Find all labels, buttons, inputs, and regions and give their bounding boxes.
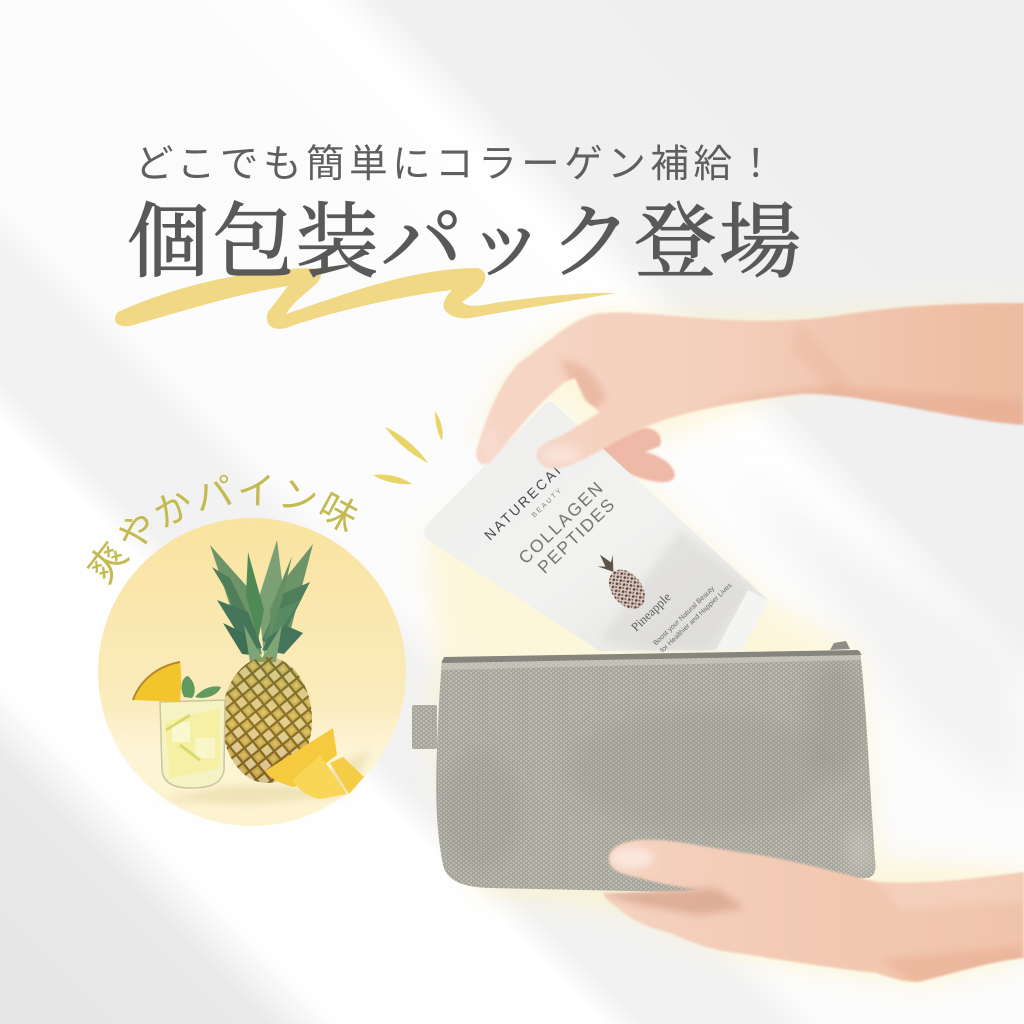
lower hand	[600, 840, 1024, 985]
sachet brand text: COLLAGEN	[515, 477, 608, 568]
table shadow	[160, 748, 372, 805]
sachet small print: for Healthier and Happier Lives	[659, 582, 734, 654]
pineapple crown	[210, 540, 313, 662]
main heading: 個包装パック登場	[127, 197, 801, 288]
mint leaves	[181, 676, 221, 698]
zipper pull	[830, 641, 850, 650]
upper hand: back fingers	[590, 425, 675, 482]
light band below zipper	[442, 652, 862, 670]
pineapple slice on glass	[133, 662, 181, 702]
soft yellow glow behind hand and pouch	[424, 300, 1024, 986]
zipper	[442, 650, 862, 663]
sachet flavour text: Pineapple	[628, 590, 674, 634]
pineapple body	[222, 657, 312, 783]
fabric mottling	[440, 660, 874, 876]
icon: burst lines	[373, 411, 443, 484]
upper hand: arm, index finger and thumb	[476, 303, 1024, 468]
yellow brush squiggle	[115, 268, 616, 329]
flavour label: 爽やかパイン味	[86, 474, 358, 585]
subtitle: どこでも簡単にコラーゲン補給！	[135, 143, 775, 186]
pineapple photo circle	[98, 518, 406, 826]
thumb highlight and palm shading	[600, 847, 1024, 985]
sachet brand text	[481, 449, 622, 588]
glass of juice	[160, 700, 225, 788]
canvas pouch	[436, 641, 876, 892]
sachet pineapple illustration	[588, 545, 652, 616]
pineapple wedges	[265, 728, 364, 799]
sachet small print: Boost your Natural Beauty	[652, 585, 716, 647]
hand shading	[540, 331, 1020, 466]
sachet brand text: NATURECAI	[481, 461, 565, 543]
sachet brand text: BEAUTY	[531, 486, 564, 519]
sachet	[424, 402, 768, 654]
sachet brand text: PEPTIDES	[533, 493, 619, 577]
pouch tab	[412, 705, 437, 749]
